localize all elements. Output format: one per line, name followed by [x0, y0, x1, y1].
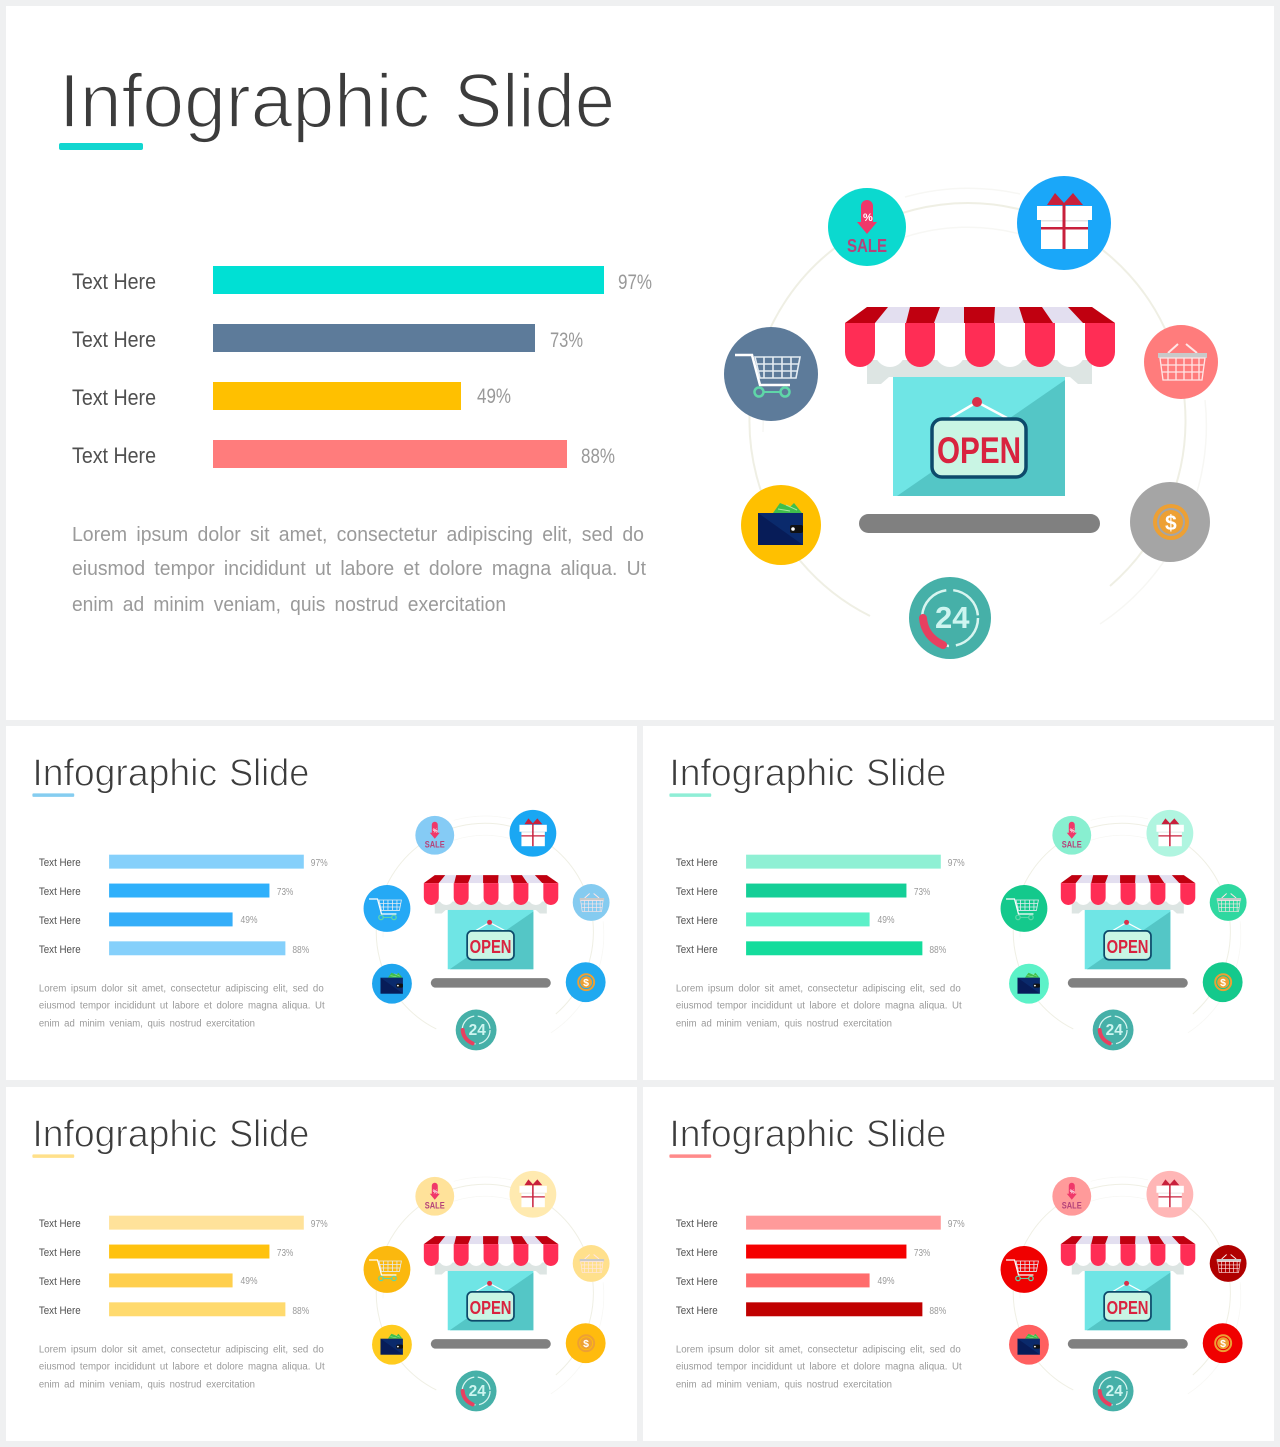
bar chart: 73% — [277, 1248, 293, 1259]
icon: 24 hour phone — [1093, 1371, 1134, 1411]
bar chart: 73% — [550, 329, 583, 352]
icon: sale — [828, 188, 906, 266]
body text — [676, 984, 962, 1029]
title: Infographic — [32, 752, 217, 794]
panel: yellow slide — [6, 1087, 637, 1441]
title underline — [32, 793, 74, 797]
bar chart: Text Here — [676, 1247, 718, 1259]
bar chart: 97% — [311, 1219, 328, 1230]
icon: gift — [1146, 810, 1193, 857]
body text: enim ad minim veniam, quis nostrud exercitation — [676, 1379, 892, 1390]
icon: coin — [566, 962, 606, 1002]
bar chart: 73% — [914, 1248, 930, 1259]
bar chart: 97% — [311, 858, 328, 869]
icon: sale: SALE — [1062, 1201, 1082, 1211]
bar chart: Text Here — [39, 857, 81, 869]
bar chart — [676, 855, 965, 956]
title: Slide — [866, 1113, 946, 1155]
icon: wallet — [1009, 964, 1049, 1004]
store illustration: OPEN — [470, 936, 511, 957]
body text: eiusmod tempor incididunt ut labore et dolore magna aliqua. Ut — [676, 1362, 962, 1373]
store illustration: OPEN — [1107, 1297, 1148, 1318]
body text — [39, 1345, 325, 1390]
title: Infographic — [669, 1113, 854, 1155]
body text — [676, 1345, 962, 1390]
body text: Lorem ipsum dolor sit amet, consectetur adipiscing elit, sed do — [676, 1345, 961, 1356]
body text: enim ad minim veniam, quis nostrud exercitation — [72, 594, 506, 616]
icon: 24 hour phone — [456, 1371, 497, 1411]
icon: 24 hour phone: 24 — [469, 1022, 486, 1039]
body text: eiusmod tempor incididunt ut labore et dolore magna aliqua. Ut — [676, 1001, 962, 1012]
bar chart: Text Here — [676, 915, 718, 927]
icon: coin — [1130, 482, 1210, 562]
icon: basket — [1144, 325, 1218, 399]
body text — [39, 984, 325, 1029]
store illustration: OPEN — [937, 430, 1021, 471]
store illustration: OPEN — [470, 1297, 511, 1318]
icon: sale: % — [863, 212, 873, 224]
icon: 24 hour phone: 24 — [935, 600, 970, 635]
title: Slide — [866, 752, 946, 794]
icon: sale — [1052, 1177, 1091, 1216]
ring of connector lines — [376, 1177, 604, 1394]
bar chart: 49% — [241, 915, 257, 926]
bar chart: Text Here — [676, 944, 718, 956]
bar chart: 49% — [477, 385, 511, 408]
icon: 24 hour phone: 24 — [1106, 1383, 1123, 1400]
icon: coin — [566, 1323, 606, 1363]
icon: wallet — [741, 485, 821, 565]
icon: sale: SALE — [847, 236, 887, 256]
icon: basket — [1210, 884, 1247, 921]
icon: coin: $ — [1165, 512, 1177, 535]
bar chart: 88% — [929, 1306, 946, 1317]
body text — [72, 524, 646, 616]
bar chart: Text Here — [39, 915, 81, 927]
icon: sale: SALE — [425, 840, 445, 850]
bar chart: Text Here — [676, 886, 718, 898]
icon: sale: SALE — [1062, 840, 1082, 850]
bar chart — [39, 855, 328, 956]
icon: coin: $ — [583, 978, 589, 989]
bar chart: Text Here — [39, 1276, 81, 1288]
title underline — [669, 793, 711, 797]
icon: 24 hour phone — [1093, 1010, 1134, 1050]
bar chart: 97% — [948, 858, 965, 869]
body text: Lorem ipsum dolor sit amet, consectetur adipiscing elit, sed do — [39, 1345, 324, 1356]
icon: sale — [415, 816, 454, 855]
title: Infographic — [669, 752, 854, 794]
title: Slide — [229, 1113, 309, 1155]
icon: cart — [1001, 1246, 1047, 1293]
bar chart: Text Here — [39, 1247, 81, 1259]
store illustration — [424, 1236, 558, 1349]
bar chart: 73% — [277, 887, 293, 898]
icon: coin: $ — [583, 1339, 589, 1350]
icon: wallet — [1009, 1325, 1049, 1365]
icon: cart — [724, 327, 818, 421]
bar chart: Text Here — [72, 327, 156, 352]
icon: coin — [1203, 1323, 1243, 1363]
bar chart: 97% — [618, 271, 652, 294]
ring of connector lines — [1013, 1177, 1241, 1394]
store illustration — [1061, 875, 1195, 988]
bar chart: 49% — [241, 1276, 257, 1287]
bar chart: 49% — [878, 1276, 894, 1287]
icon: coin: $ — [1220, 978, 1226, 989]
icon: gift — [1017, 176, 1111, 270]
title underline — [32, 1154, 74, 1158]
icon: sale: SALE — [425, 1201, 445, 1211]
icon: coin — [1203, 962, 1243, 1002]
store illustration: OPEN — [1107, 936, 1148, 957]
bar chart: 88% — [292, 945, 309, 956]
bar chart: Text Here — [39, 886, 81, 898]
title: Infographic — [59, 59, 430, 144]
icon: gift — [509, 810, 556, 857]
bar chart — [676, 1216, 965, 1317]
icon: gift — [1146, 1171, 1193, 1218]
icon: wallet — [372, 1325, 412, 1365]
icon: coin: $ — [1220, 1339, 1226, 1350]
icon: 24 hour phone: 24 — [1106, 1022, 1123, 1039]
body text: Lorem ipsum dolor sit amet, consectetur adipiscing elit, sed do — [72, 524, 644, 546]
bar chart: Text Here — [676, 1276, 718, 1288]
body text: enim ad minim veniam, quis nostrud exercitation — [676, 1018, 892, 1029]
body text: eiusmod tempor incididunt ut labore et dolore magna aliqua. Ut — [39, 1001, 325, 1012]
bar chart: 97% — [948, 1219, 965, 1230]
ring of connector lines — [376, 816, 604, 1033]
body text: eiusmod tempor incididunt ut labore et dolore magna aliqua. Ut — [39, 1362, 325, 1373]
bar chart: Text Here — [39, 944, 81, 956]
store illustration — [845, 307, 1115, 533]
body text: enim ad minim veniam, quis nostrud exercitation — [39, 1379, 255, 1390]
bar chart: Text Here — [676, 1305, 718, 1317]
bar chart: Text Here — [72, 443, 156, 468]
icon: sale: % — [1070, 1189, 1075, 1195]
icon: sale: % — [433, 1189, 438, 1195]
title underline — [669, 1154, 711, 1158]
icon: wallet — [372, 964, 412, 1004]
icon: basket — [1210, 1245, 1247, 1282]
icon: 24 hour phone — [456, 1010, 497, 1050]
icon: sale: % — [433, 828, 438, 834]
ring of connector lines — [750, 188, 1206, 624]
title underline — [59, 143, 143, 150]
icon: 24 hour phone — [909, 577, 991, 659]
icon: gift — [509, 1171, 556, 1218]
icon: sale: % — [1070, 828, 1075, 834]
icon: cart — [364, 885, 410, 932]
store illustration — [1061, 1236, 1195, 1349]
bar chart: Text Here — [676, 1218, 718, 1230]
icon: basket — [573, 884, 610, 921]
icon: basket — [573, 1245, 610, 1282]
icon: cart — [1001, 885, 1047, 932]
panel: main slide — [6, 6, 1274, 720]
title: Infographic — [32, 1113, 217, 1155]
bar chart — [72, 266, 652, 468]
title: Slide — [229, 752, 309, 794]
bar chart: Text Here — [72, 269, 156, 294]
panel: red slide — [643, 1087, 1274, 1441]
bar chart: Text Here — [39, 1305, 81, 1317]
store illustration — [424, 875, 558, 988]
bar chart: Text Here — [676, 857, 718, 869]
title: Slide — [454, 59, 615, 144]
bar chart: 88% — [929, 945, 946, 956]
bar chart: 73% — [914, 887, 930, 898]
bar chart: Text Here — [72, 385, 156, 410]
icon: sale — [1052, 816, 1091, 855]
body text: Lorem ipsum dolor sit amet, consectetur adipiscing elit, sed do — [39, 984, 324, 995]
icon: cart — [364, 1246, 410, 1293]
icon: 24 hour phone: 24 — [469, 1383, 486, 1400]
body text: Lorem ipsum dolor sit amet, consectetur adipiscing elit, sed do — [676, 984, 961, 995]
body text: enim ad minim veniam, quis nostrud exercitation — [39, 1018, 255, 1029]
icon: sale — [415, 1177, 454, 1216]
panel: blue slide — [6, 726, 637, 1080]
ring of connector lines — [1013, 816, 1241, 1033]
bar chart: 49% — [878, 915, 894, 926]
panel: green slide — [643, 726, 1274, 1080]
bar chart: 88% — [581, 445, 615, 468]
bar chart: 88% — [292, 1306, 309, 1317]
body text: eiusmod tempor incididunt ut labore et dolore magna aliqua. Ut — [72, 558, 646, 580]
bar chart — [39, 1216, 328, 1317]
bar chart: Text Here — [39, 1218, 81, 1230]
